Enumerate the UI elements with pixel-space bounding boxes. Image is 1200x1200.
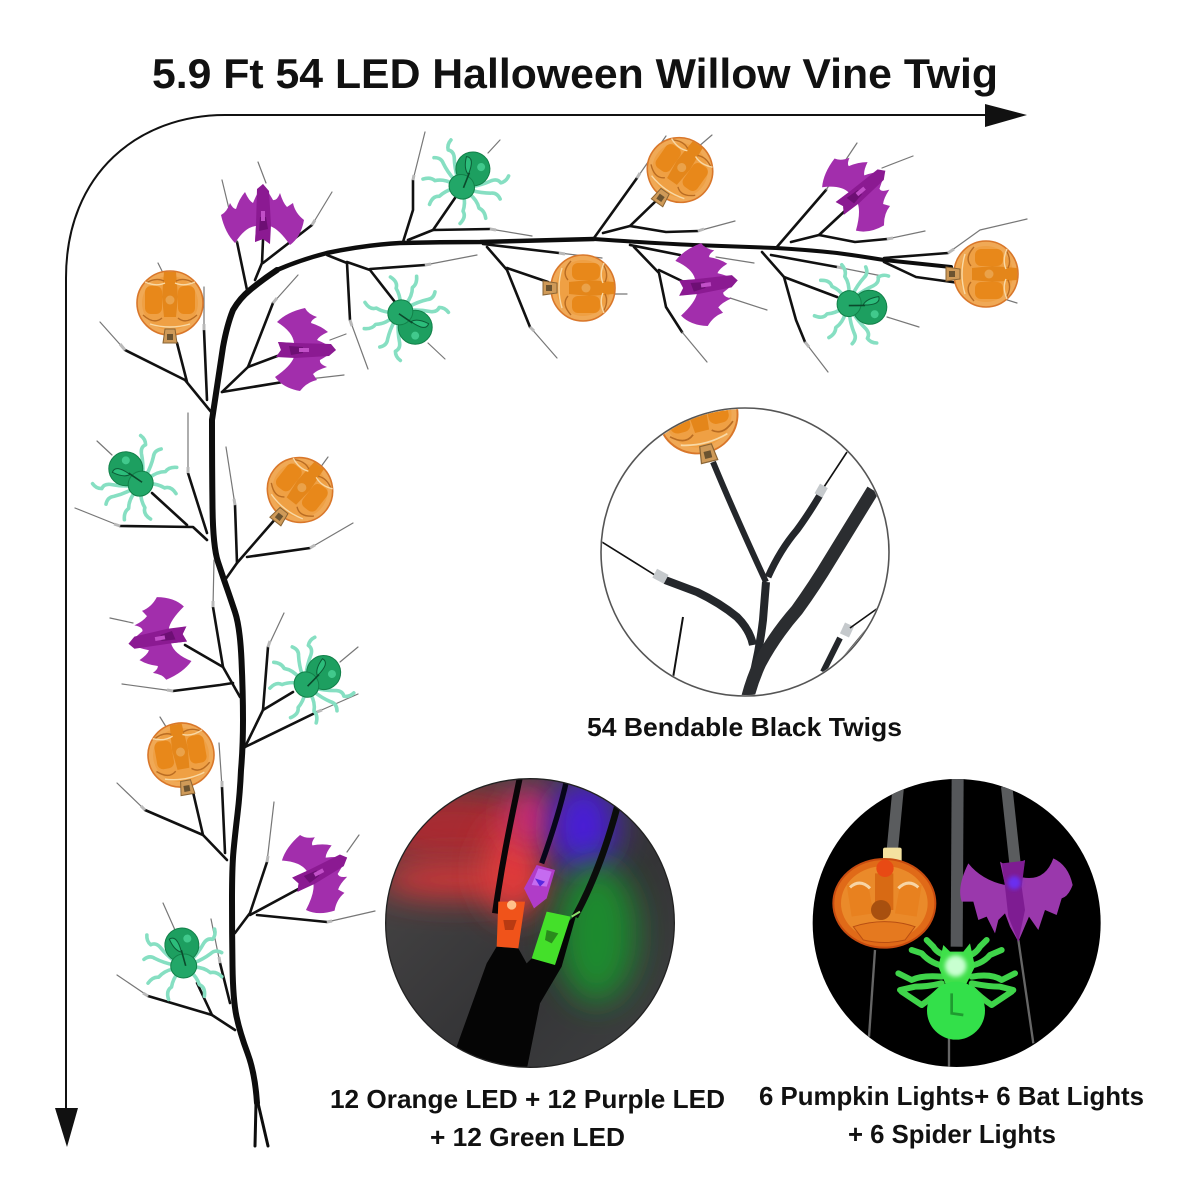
caption: light shapes: 6 Pumpkin Lights+ 6 Bat Lights [759,1081,1144,1111]
icon: pumpkin light [249,444,346,542]
panel: pumpkin, bat and spider lights close-up [805,770,1105,1070]
title: 5.9 Ft 54 LED Halloween Willow Vine Twig [152,50,998,97]
icon: spider light [142,925,225,1001]
caption: LED colours: 12 Orange LED + 12 Purple LED [330,1084,725,1114]
main stem [212,239,951,1146]
caption: light shapes second line: + 6 Spider Lights [848,1119,1056,1149]
vine: main trunk and branches [75,132,1027,1146]
panel: bendable black twigs close-up [600,407,890,697]
twig branches [120,178,959,1030]
icon: bat light [121,593,196,685]
icon: bat light [275,308,336,391]
icon: bat light [812,139,912,241]
icon: bat light [274,820,366,922]
panel: coloured LED close-up [385,778,675,1068]
caption: twigs: 54 Bendable Black Twigs [587,712,902,742]
pale LED tips on twig ends [114,173,954,996]
icon: pumpkin light [630,125,725,222]
inset icon: spider [898,940,1015,1040]
icon: spider light [412,134,515,235]
icon: bat light [671,239,743,329]
icon: pumpkin light [946,241,1018,307]
icon: pumpkin light [543,255,615,321]
icon: pumpkin light [143,718,220,800]
icon: pumpkin light [137,271,203,343]
inset icon: bat [960,858,1073,942]
icon: bat light [221,184,304,245]
icon: spider light [811,260,893,349]
icon: spider light [86,429,191,534]
thin wire tips [75,132,1027,996]
dimension arrow: L-shaped length indicator [55,104,1027,1147]
icon: spider light [258,631,360,735]
inset icon: pumpkin [833,848,935,948]
icon: spider light [350,262,455,367]
caption: LED colours second line: + 12 Green LED [430,1122,625,1152]
